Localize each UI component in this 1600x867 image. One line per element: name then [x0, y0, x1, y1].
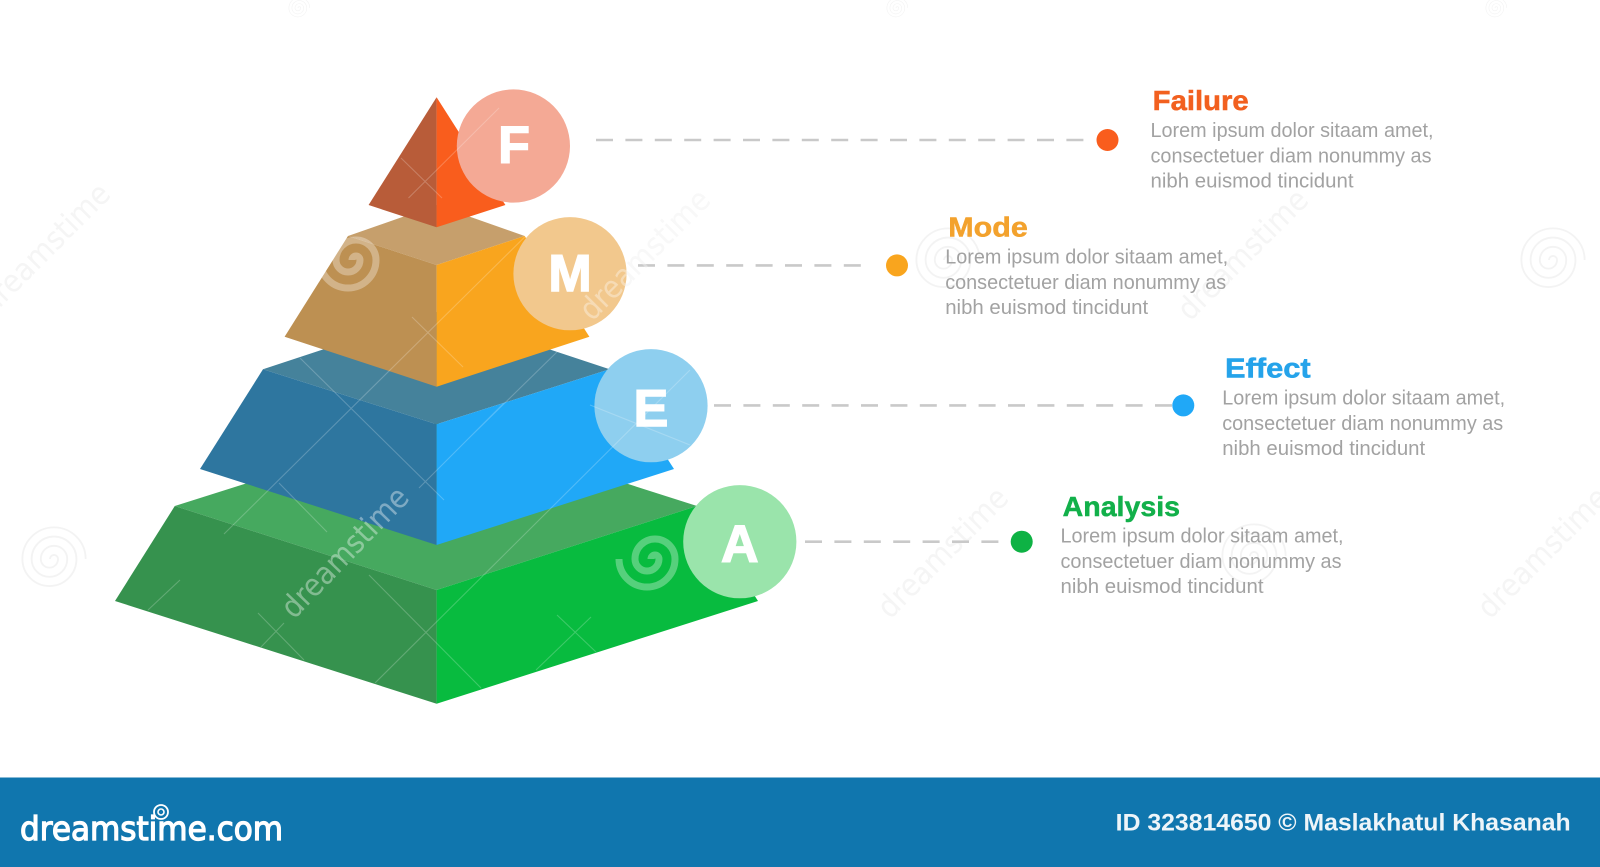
callout: Analysis: consectetuer diam nonummy as	[1060, 550, 1342, 573]
badge: M: M	[548, 245, 592, 303]
callout: Effect: Lorem ipsum dolor sitaam amet,	[1222, 387, 1505, 410]
callout: Analysis: Lorem ipsum dolor sitaam amet,	[1060, 524, 1344, 547]
callout: Effect	[1172, 353, 1505, 460]
watermark text on white background: dreamstime	[572, 182, 718, 328]
footer logo: dreamstime.com	[20, 809, 283, 848]
callout: Effect: consectetuer diam nonummy as	[1222, 412, 1503, 435]
badge: A	[683, 485, 796, 598]
callout: Failure: Failure	[1153, 85, 1249, 116]
badge: F: F	[498, 117, 530, 175]
badge: F	[457, 89, 570, 203]
callout: Analysis	[1011, 491, 1344, 598]
callout: Mode: Lorem ipsum dolor sitaam amet,	[945, 245, 1228, 268]
callout: Failure	[1096, 85, 1434, 192]
callout: Mode	[886, 212, 1228, 319]
watermarks on white background	[22, 0, 1585, 586]
badge: E	[594, 349, 708, 462]
watermark text on white background: dreamstime	[1170, 182, 1316, 328]
watermark spirals on pyramid	[320, 240, 675, 587]
watermark text over badge M: dreamstime	[572, 182, 718, 328]
footer credit: ID 323814650 © Maslakhatul Khasanah	[1116, 810, 1571, 837]
callout: Mode: Mode	[948, 212, 1028, 243]
badge: M	[513, 217, 627, 330]
badge: A: A	[721, 516, 759, 574]
watermark text on white background	[0, 176, 1600, 626]
tier: Mode	[285, 205, 589, 387]
tier: Analysis	[115, 423, 758, 704]
badge: E: E	[634, 380, 668, 438]
watermark text on pyramid: dreamstime	[274, 480, 416, 626]
callout: Effect: nibh euismod tincidunt	[1222, 437, 1425, 460]
callout: Effect: Effect	[1225, 353, 1311, 384]
footer banner	[0, 778, 1600, 867]
tier: Effect	[200, 312, 674, 545]
callout: Failure: consectetuer diam nonummy as	[1150, 144, 1432, 168]
callout: Analysis: nibh euismod tincidunt	[1060, 575, 1264, 598]
callout: Mode: consectetuer diam nonummy as	[945, 271, 1226, 294]
callout: Failure: Lorem ipsum dolor sitaam amet,	[1150, 119, 1434, 142]
watermark text on white background: dreamstime	[870, 480, 1016, 626]
callout: Failure: nibh euismod tincidunt	[1150, 170, 1354, 192]
tier: Failure	[369, 97, 505, 227]
pyramid	[115, 97, 758, 704]
dashed connectors	[596, 140, 1176, 542]
watermark lines over pyramid	[148, 108, 690, 688]
callout: Analysis: Analysis	[1063, 491, 1180, 522]
callout: Mode: nibh euismod tincidunt	[945, 296, 1148, 319]
